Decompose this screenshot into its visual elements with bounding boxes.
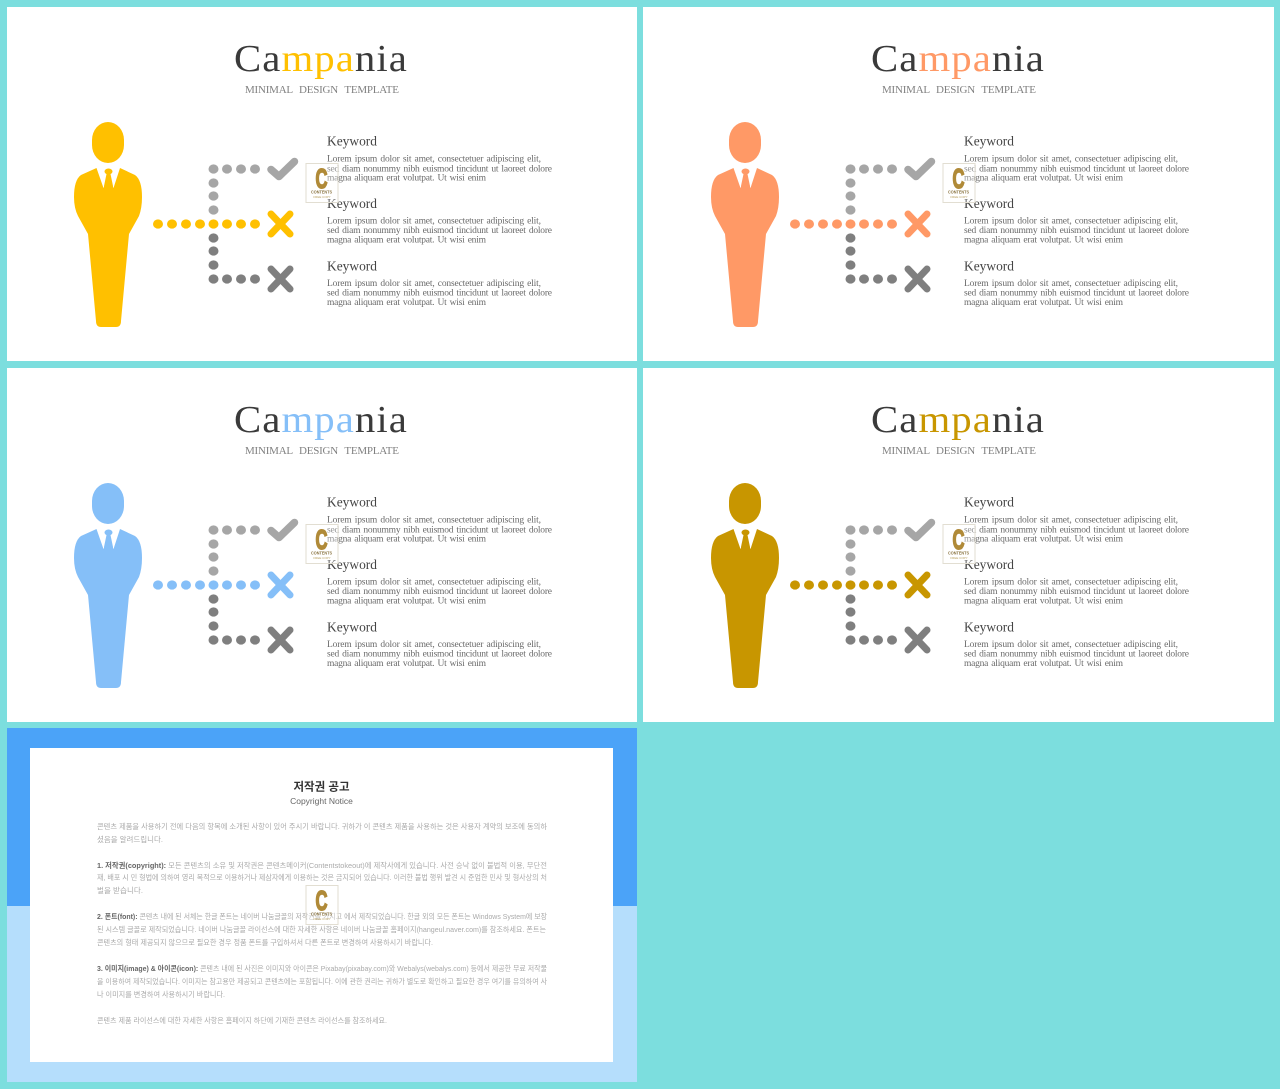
icon: businessman [711, 122, 779, 327]
icon: businessman [74, 483, 142, 688]
dotted connector lines [790, 525, 897, 645]
icon: cross highlighted [908, 214, 927, 234]
text block 1: Keyword [964, 494, 1014, 510]
text block 1: Lorem ipsum dolor sit amet, consectetuer adipiscing elit, [327, 154, 541, 164]
text block 2 [327, 557, 552, 606]
text block 1: Keyword [964, 134, 1014, 148]
notice section 1: 재, 배포 시 민 형법에 의하여 영리 목적으로 이용하거나 제삼자에게 이용하는 것은 금지되어 있습니다. 이러한 불법 행위 발견 시 준엄한 민사 및 형사상의 처 [97, 872, 547, 882]
text block 3: Lorem ipsum dolor sit amet, consectetuer adipiscing elit, [327, 279, 541, 289]
subtitle: MINIMAL DESIGN TEMPLATE [882, 84, 1036, 96]
text block 2: sed diam nonummy nibh euismod tincidunt ut laoreet dolore [964, 226, 1189, 236]
watermark: FREE COPY [313, 195, 331, 199]
text block 2: magna aliquam erat volutpat. Ut wisi enim [327, 596, 487, 606]
notice section 1: 1. 저작권(copyright): 모든 콘텐츠의 소유 및 저작권은 콘텐츠메이커(Contentstokeout)에 제작사에게 있습니다. 사전 승낙 없이 불법적 이용, 무단전 [97, 860, 547, 870]
text block 3 [964, 620, 1189, 669]
watermark: FREE COPY [950, 556, 968, 560]
text block 3 [327, 620, 552, 669]
watermark: C [952, 163, 964, 194]
text block 1: magna aliquam erat volutpat. Ut wisi enim [327, 534, 487, 544]
text block 2: Keyword [327, 196, 377, 211]
notice section 3: 3. 이미지(image) & 아이콘(icon): 콘텐츠 내에 된 사진은 이미지와 아이콘은 Pixabay(pixabay.com)와 Webalys(webalys.com) 등에서 제공한 무료 저작물 [97, 963, 547, 973]
panel: copyright notice [7, 728, 637, 1082]
icon: check [271, 162, 294, 176]
text block 3: magna aliquam erat volutpat. Ut wisi enim [327, 298, 487, 308]
icon: check [908, 162, 932, 176]
text block 3: Lorem ipsum dolor sit amet, consectetuer adipiscing elit, [964, 640, 1178, 650]
dotted connector lines [153, 525, 260, 645]
text block 1: Keyword [327, 134, 377, 148]
title: Campania [234, 38, 408, 80]
title: Campania [871, 38, 1045, 80]
icon: cross dark [908, 630, 927, 650]
notice intro: 콘텐츠 제품을 사용하기 전에 다음의 항목에 소개된 사항이 있어 주시기 바랍니다. 귀하가 이 콘텐츠 제품을 사용하는 것은 사용자 계약의 보조에 동의하 [97, 821, 547, 831]
notice subheading: Copyright Notice [290, 796, 353, 806]
icon: cross dark [271, 630, 290, 650]
text block 3: Keyword [327, 258, 377, 274]
text block 2: magna aliquam erat volutpat. Ut wisi enim [964, 596, 1124, 606]
notice section 3: 나 이미지를 변경하여 사용하시기 바랍니다. [97, 989, 225, 999]
text block 3: sed diam nonummy nibh euismod tincidunt ut laoreet dolore [964, 650, 1189, 660]
text block 2 [964, 557, 1189, 606]
icon: cross highlighted [271, 575, 290, 595]
text block 1: Keyword [327, 494, 377, 510]
watermark [306, 524, 338, 564]
icon: check [908, 522, 932, 538]
text block 1: sed diam nonummy nibh euismod tincidunt ut laoreet dolore [964, 526, 1189, 536]
text block 1: Lorem ipsum dolor sit amet, consectetuer adipiscing elit, [964, 516, 1178, 526]
notice intro: 셨음을 알려드립니다. [97, 834, 163, 844]
text block 1: magna aliquam erat volutpat. Ut wisi enim [964, 534, 1124, 544]
text block 1 [964, 494, 1189, 544]
text block 3: Keyword [964, 620, 1014, 634]
icon: businessman [74, 122, 142, 327]
subtitle: MINIMAL DESIGN TEMPLATE [245, 84, 399, 96]
text block 1: Lorem ipsum dolor sit amet, consectetuer adipiscing elit, [327, 516, 541, 526]
text block 3: magna aliquam erat volutpat. Ut wisi enim [964, 298, 1124, 308]
text block 2 [327, 196, 552, 246]
watermark: CONTENTS [311, 912, 332, 916]
notice section 2: 콘텐츠의 형태 제공되지 않으므로 필요한 경우 정품 폰트를 구입하셔서 다른 폰트로 변경하여 사용하시기 바랍니다. [97, 937, 433, 947]
text block 2 [964, 196, 1189, 246]
watermark [306, 885, 338, 924]
icon: cross highlighted [908, 575, 927, 595]
title: Campania [871, 399, 1045, 441]
panel: blue template slide [7, 368, 637, 722]
subtitle: MINIMAL DESIGN TEMPLATE [882, 445, 1036, 457]
text block 2: Keyword [964, 196, 1014, 211]
text block 2: Lorem ipsum dolor sit amet, consectetuer adipiscing elit, [964, 578, 1178, 588]
notice closing line: 콘텐츠 제품 라이선스에 대한 자세한 사항은 홈페이지 하단에 기재한 콘텐츠 라이선스를 참조하세요. [97, 1015, 387, 1025]
text block 1: sed diam nonummy nibh euismod tincidunt ut laoreet dolore [327, 164, 552, 174]
text block 3: sed diam nonummy nibh euismod tincidunt ut laoreet dolore [327, 288, 552, 298]
text block 2: Keyword [964, 557, 1014, 572]
watermark: FREE COPY [950, 195, 968, 199]
text block 3: Lorem ipsum dolor sit amet, consectetuer adipiscing elit, [964, 279, 1178, 289]
icon: businessman [711, 483, 779, 688]
notice intro [97, 821, 547, 844]
watermark: C [316, 524, 328, 555]
watermark: C [316, 163, 328, 194]
watermark: CONTENTS [948, 190, 969, 194]
watermark: CONTENTS [311, 550, 332, 556]
panel: orange template slide [643, 7, 1274, 361]
notice section 2: 된 시스템 글꼴로 제작되었습니다. 네이버 나눔글꼴 라이선스에 대한 자세한 사항은 네이버 나눔글꼴 홈페이지(hangeul.naver.com)를 참조하세요. 폰트는 [97, 924, 546, 934]
watermark [943, 163, 975, 202]
text block 2: sed diam nonummy nibh euismod tincidunt ut laoreet dolore [964, 587, 1189, 597]
text block 1: magna aliquam erat volutpat. Ut wisi enim [327, 174, 487, 184]
panel: yellow template slide [7, 7, 637, 361]
notice section 2: 2. 폰트(font): 콘텐츠 내에 된 서체는 한글 폰트는 네이버 나눔글꼴의 저작권을 가지고 에서 제작되었습니다. 한글 외의 모든 폰트는 Windows System에 보장 [97, 911, 547, 921]
notice section 3 [97, 963, 547, 999]
watermark: CONTENTS [948, 550, 969, 556]
text block 1: Lorem ipsum dolor sit amet, consectetuer adipiscing elit, [964, 154, 1178, 164]
icon: cross dark [271, 269, 290, 289]
dotted connector lines [153, 164, 260, 284]
text block 2: Lorem ipsum dolor sit amet, consectetuer adipiscing elit, [964, 216, 1178, 226]
text block 3: Keyword [327, 620, 377, 634]
text block 3: Lorem ipsum dolor sit amet, consectetuer adipiscing elit, [327, 640, 541, 650]
text block 1: sed diam nonummy nibh euismod tincidunt ut laoreet dolore [327, 526, 552, 536]
icon: check [271, 522, 294, 538]
notice section 1 [97, 860, 547, 895]
notice heading: 저작권 공고 [293, 780, 350, 794]
watermark: FREE COPY [313, 556, 331, 560]
watermark [306, 163, 338, 202]
text block 1 [327, 134, 552, 184]
notice section 1: 벌을 받습니다. [97, 885, 143, 895]
watermark: C [316, 885, 328, 916]
text block 3: magna aliquam erat volutpat. Ut wisi enim [327, 659, 487, 669]
text block 3: magna aliquam erat volutpat. Ut wisi enim [964, 659, 1124, 669]
text block 1 [327, 494, 552, 544]
panel: gold template slide [643, 368, 1274, 722]
watermark: FREE COPY [313, 917, 331, 921]
watermark: C [952, 524, 964, 555]
notice section 2 [97, 911, 547, 947]
text block 2: Keyword [327, 557, 377, 572]
text block 1: sed diam nonummy nibh euismod tincidunt ut laoreet dolore [964, 164, 1189, 174]
text block 1: magna aliquam erat volutpat. Ut wisi enim [964, 174, 1124, 184]
text block 3: sed diam nonummy nibh euismod tincidunt ut laoreet dolore [327, 650, 552, 660]
text block 3 [327, 258, 552, 308]
text block 3 [964, 258, 1189, 308]
text block 1 [964, 134, 1189, 184]
subtitle: MINIMAL DESIGN TEMPLATE [245, 445, 399, 457]
text block 3: sed diam nonummy nibh euismod tincidunt ut laoreet dolore [964, 288, 1189, 298]
text block 2: Lorem ipsum dolor sit amet, consectetuer adipiscing elit, [327, 216, 541, 226]
text block 2: Lorem ipsum dolor sit amet, consectetuer adipiscing elit, [327, 578, 541, 588]
icon: cross dark [908, 269, 927, 289]
watermark: CONTENTS [311, 190, 332, 194]
icon: cross highlighted [271, 214, 290, 234]
dotted connector lines [790, 164, 897, 284]
title: Campania [234, 399, 408, 441]
text block 2: sed diam nonummy nibh euismod tincidunt ut laoreet dolore [327, 587, 552, 597]
notice section 3: 을 이용하여 제작되었습니다. 이미지는 참고용만 제공되고 콘텐츠에는 포함됩니다. 이에 관한 권리는 귀하가 별도로 확인하고 필요한 경우 여기를 유의하여 사 [97, 976, 547, 986]
text block 2: sed diam nonummy nibh euismod tincidunt ut laoreet dolore [327, 226, 552, 236]
text block 2: magna aliquam erat volutpat. Ut wisi enim [964, 236, 1124, 246]
watermark [943, 524, 975, 564]
text block 3: Keyword [964, 258, 1014, 274]
text block 2: magna aliquam erat volutpat. Ut wisi enim [327, 236, 487, 246]
